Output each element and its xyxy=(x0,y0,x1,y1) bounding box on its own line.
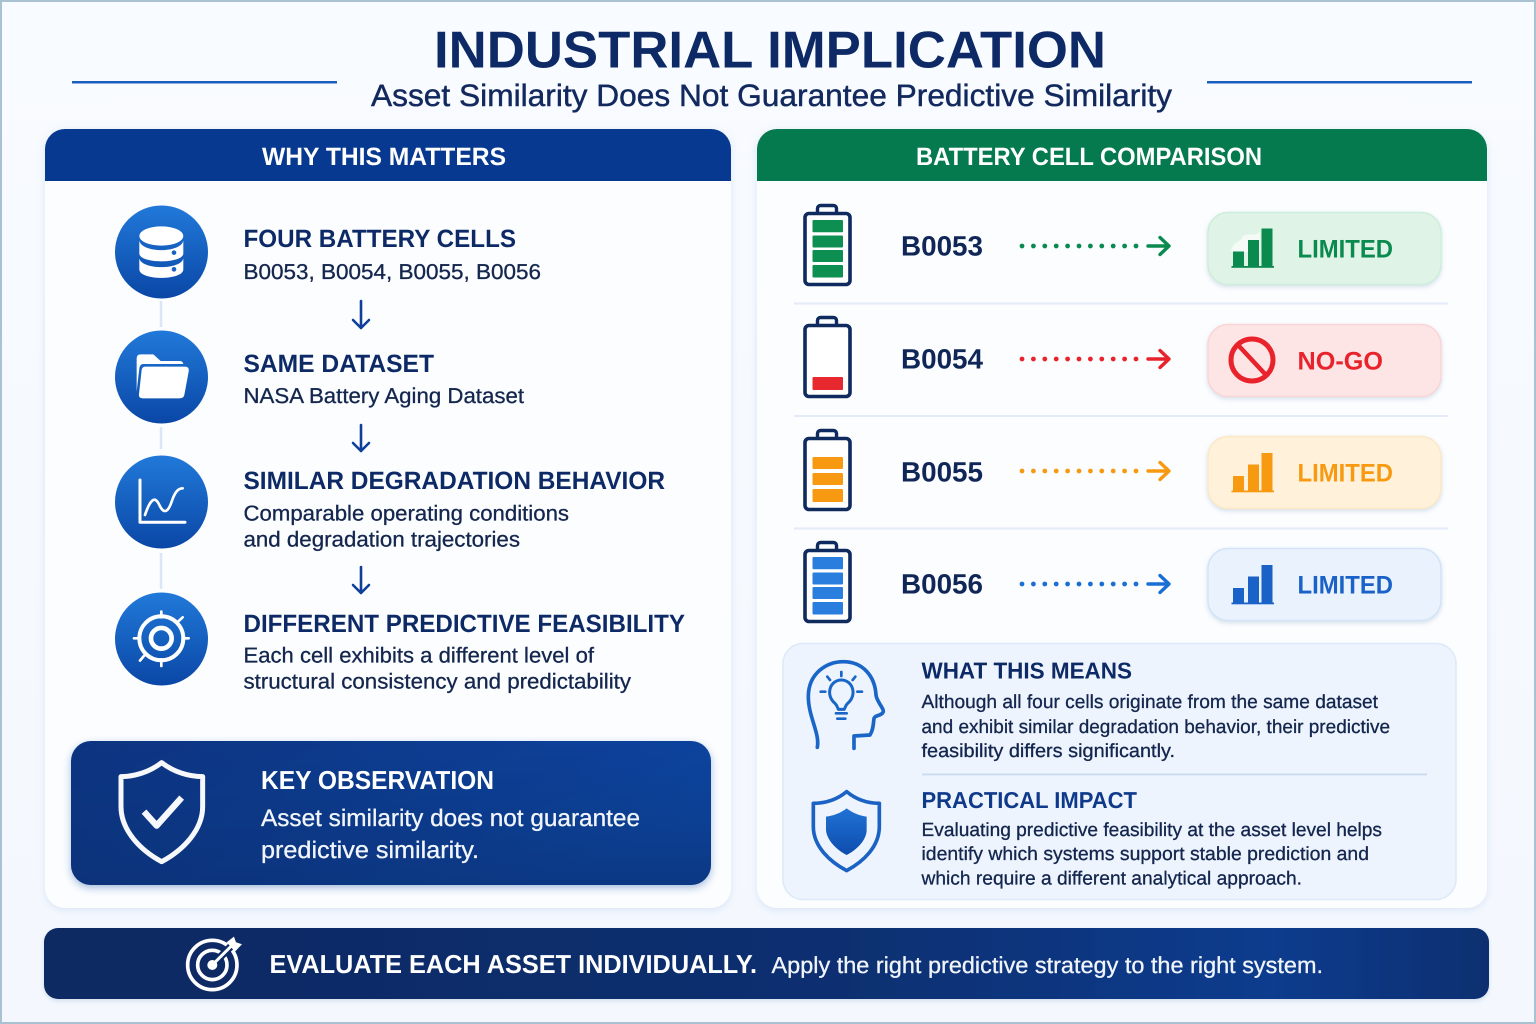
panel: what this means and practical impact: WHAT THIS MEANS xyxy=(922,658,1132,684)
step: same dataset xyxy=(244,350,524,408)
icon: head with lightbulb xyxy=(808,662,883,748)
status pill: limited xyxy=(1208,436,1441,508)
panel: what this means and practical impact: and exhibit similar degradation behavior, their predictive xyxy=(922,717,1390,738)
row: B0054 xyxy=(805,318,1441,396)
row: B0055 xyxy=(805,430,1441,510)
arrow: dotted green xyxy=(1022,238,1169,254)
panel header: battery cell comparison: BATTERY CELL COMPARISON xyxy=(916,143,1262,171)
row: B0053 xyxy=(805,206,1441,284)
bottom banner xyxy=(44,928,1489,999)
row: B0056: B0056 xyxy=(901,568,983,600)
icon: folder xyxy=(115,330,208,424)
row: B0054: B0054 xyxy=(901,344,983,374)
icon: blue shield xyxy=(813,792,879,871)
icon: orange battery xyxy=(805,430,850,510)
step: different predictive feasibility: structural consistency and predictability xyxy=(244,670,631,694)
status pill: limited xyxy=(1208,212,1441,284)
row: B0055: B0055 xyxy=(901,456,983,488)
callout: key observation: KEY OBSERVATION xyxy=(261,765,494,795)
icon: full green battery xyxy=(805,206,850,284)
icon: target with arrow xyxy=(188,937,242,990)
icon: degradation chart xyxy=(115,456,208,548)
step: four battery cells xyxy=(244,225,541,284)
step: different predictive feasibility: Each cell exhibits a different level of xyxy=(244,644,594,668)
step: different predictive feasibility xyxy=(244,610,685,694)
panel: why this matters xyxy=(45,129,731,908)
status pill: limited: LIMITED xyxy=(1298,460,1393,488)
icon: blue battery xyxy=(805,542,850,622)
status pill: limited: LIMITED xyxy=(1298,572,1393,600)
status pill: limited: LIMITED xyxy=(1298,236,1393,264)
status pill: no-go xyxy=(1208,324,1441,396)
step: different predictive feasibility: DIFFERENT PREDICTIVE FEASIBILITY xyxy=(244,610,685,638)
panel header: battery cell comparison xyxy=(757,129,1487,181)
panel: what this means and practical impact: identify which systems support stable prediction and xyxy=(922,844,1369,865)
panel: what this means and practical impact: Although all four cells originate from the same dataset xyxy=(922,692,1379,713)
status pill: no-go: NO-GO xyxy=(1298,348,1383,376)
panel: what this means and practical impact: PRACTICAL IMPACT xyxy=(922,787,1137,813)
step: same dataset: SAME DATASET xyxy=(244,350,434,378)
icon: shield check xyxy=(121,763,203,862)
callout: key observation: Asset similarity does not guarantee xyxy=(261,805,640,832)
step connectors xyxy=(160,301,162,589)
panel header: why this matters: WHY THIS MATTERS xyxy=(262,143,506,171)
title: INDUSTRIAL IMPLICATION xyxy=(434,22,1106,80)
arrow down xyxy=(353,425,369,451)
panel: battery cell comparison xyxy=(757,129,1487,908)
bottom banner: Apply the right predictive strategy to the right system. xyxy=(772,952,1323,978)
panel: what this means and practical impact xyxy=(783,644,1456,900)
arrow: dotted blue xyxy=(1022,576,1169,592)
subtitle: Asset Similarity Does Not Guarantee Predictive Similarity xyxy=(371,78,1173,113)
status pill: limited xyxy=(1208,548,1441,620)
panel: what this means and practical impact: Evaluating predictive feasibility at the asset level helps xyxy=(922,820,1382,841)
row: B0053: B0053 xyxy=(901,230,983,262)
callout: key observation xyxy=(71,741,711,885)
arrow down xyxy=(353,567,369,593)
bottom banner: EVALUATE EACH ASSET INDIVIDUALLY. xyxy=(270,949,757,979)
arrow down xyxy=(353,301,369,328)
callout: key observation: predictive similarity. xyxy=(261,837,479,864)
icon: target gauge xyxy=(115,592,208,686)
step: similar degradation behavior xyxy=(244,467,665,552)
arrow: dotted orange xyxy=(1022,462,1169,480)
panel: what this means and practical impact: which require a different analytical approach. xyxy=(920,868,1302,890)
arrow: dotted red xyxy=(1022,350,1169,368)
step: similar degradation behavior: SIMILAR DEGRADATION BEHAVIOR xyxy=(244,467,665,495)
panel: what this means and practical impact: feasibility differs significantly. xyxy=(922,741,1175,762)
step: four battery cells: B0053, B0054, B0055, B0056 xyxy=(244,260,541,284)
step: same dataset: NASA Battery Aging Dataset xyxy=(244,384,524,408)
step: similar degradation behavior: Comparable operating conditions xyxy=(244,502,569,526)
step: four battery cells: FOUR BATTERY CELLS xyxy=(244,225,516,253)
icon: empty red battery xyxy=(805,318,850,396)
panel header: why this matters xyxy=(45,129,731,181)
row: B0056 xyxy=(805,542,1441,622)
icon: database xyxy=(115,206,208,298)
step: similar degradation behavior: and degradation trajectories xyxy=(244,528,520,552)
